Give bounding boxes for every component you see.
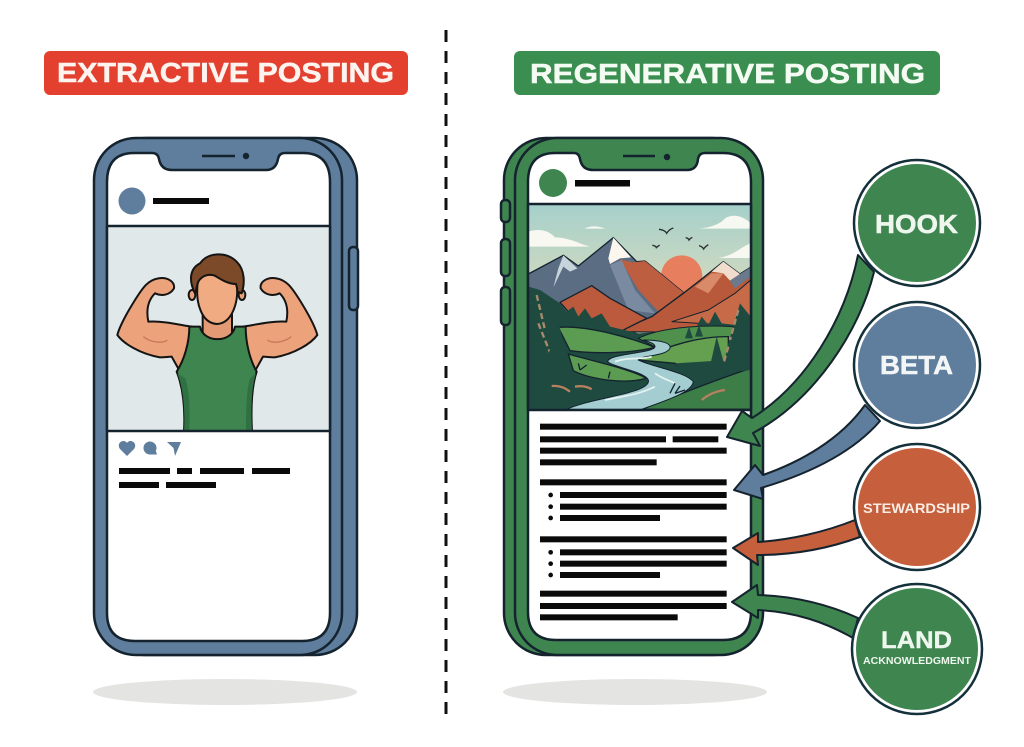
circle: beta: BETA [880,350,953,380]
arrow: hook to text [727,255,874,446]
panel: regenerative phone [501,138,763,655]
left arm [117,278,192,372]
heading: extractive posting [44,51,408,95]
circle: beta [854,302,980,428]
photo: flexing man [107,226,330,432]
hair [191,254,244,293]
neck [202,314,233,338]
shadow: right phone [503,679,767,705]
caption text lines [119,468,290,488]
shadow: left phone [93,679,357,705]
panel: extractive phone [94,138,358,655]
arrow: beta to text [734,405,880,499]
phone body: blue [94,138,358,655]
circle: land acknowledgment: ACKNOWLEDGMENT [863,655,972,667]
article text lines [540,424,727,620]
circle: land acknowledgment: LAND [881,627,952,654]
heading: regenerative posting: REGENERATIVE POSTING [530,58,925,89]
photo: mountain landscape [528,204,751,409]
ears [189,290,195,300]
post header: avatar and name [118,188,209,214]
tank top [177,327,257,432]
post header: avatar and name [539,169,630,197]
phone body: green [501,138,763,655]
icons: like, comment, share [119,441,181,456]
circle: stewardship: STEWARDSHIP [863,501,970,516]
circle: hook [854,160,980,286]
arrow: stewardship to text [733,520,860,565]
circle: hook: HOOK [875,209,958,239]
circle: land acknowledgment [852,584,982,714]
arrow: land acknowledgment to text [732,585,858,638]
circle: stewardship [854,444,980,570]
right arm [243,278,317,372]
face [197,275,237,324]
heading: regenerative posting [514,51,940,95]
heading: extractive posting: EXTRACTIVE POSTING [57,57,394,88]
